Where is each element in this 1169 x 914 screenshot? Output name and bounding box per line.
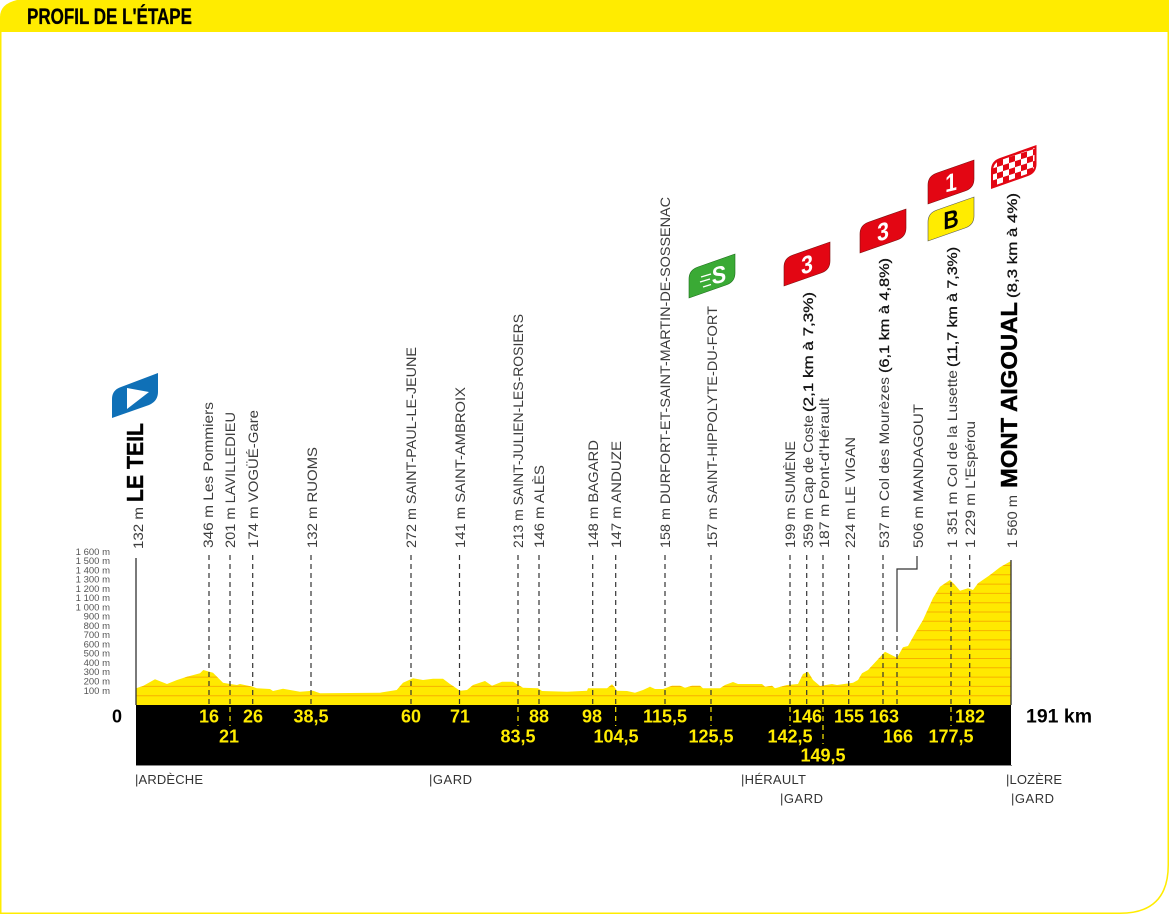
finish label: MONT AIGOUAL — [996, 302, 1022, 488]
elevation profile — [136, 555, 1011, 705]
elevation scale: 1 400 m — [76, 566, 110, 576]
waypoint labels: 201 m LAVILLEDIEU — [222, 412, 238, 548]
waypoint labels: 158 m DURFORT-ET-SAINT-MARTIN-DE-SOSSENAC — [657, 197, 673, 548]
waypoint labels: 187 m Pont-d'Hérault — [816, 398, 832, 548]
finish axis — [1010, 560, 1012, 705]
icon: bonus flag: B — [943, 204, 959, 235]
kilometre markers: 83,5 — [500, 726, 536, 746]
waypoint labels: 157 m SAINT-HIPPOLYTE-DU-FORT — [704, 306, 720, 548]
kilometre markers: 21 — [219, 726, 239, 746]
department labels — [135, 772, 1062, 806]
climb label: Col de la Lusette: 1 351 m Col de la Lusette — [944, 370, 960, 548]
elevation scale: 900 m — [84, 612, 110, 622]
waypoint labels: 213 m SAINT-JULIEN-LES-ROSIERS — [510, 314, 526, 548]
elevation scale — [76, 547, 110, 697]
kilometre markers: 38,5 — [293, 706, 329, 726]
start label — [122, 423, 148, 549]
kilometre markers: 16 — [199, 706, 219, 726]
climb label: Col de la Lusette: (11,7 km à 7,3%) — [944, 247, 960, 367]
elevation scale: 400 m — [84, 658, 110, 669]
kilometre markers: 163 — [869, 706, 899, 726]
yellow tick dashes — [230, 707, 951, 744]
climb label: Col des Mourèzes — [876, 258, 892, 548]
kilometre markers: 98 — [582, 706, 602, 726]
elevation scale: 200 m — [84, 676, 110, 688]
kilometre markers: 60 — [401, 706, 421, 726]
waypoint labels: 148 m BAGARD — [585, 440, 601, 548]
elevation scale: 700 m — [84, 630, 110, 641]
waypoint labels: 147 m ANDUZE — [608, 441, 624, 548]
department labels: |ARDÈCHE — [135, 772, 203, 787]
title: PROFIL DE L'ÉTAPE — [27, 4, 192, 29]
icon: finish flag — [991, 145, 1036, 189]
kilometre markers — [199, 706, 985, 766]
header band — [0, 0, 1169, 32]
elevation scale: 600 m — [84, 640, 110, 650]
waypoint labels: 272 m SAINT-PAUL-LE-JEUNE — [403, 347, 419, 548]
icon: category 1 flag — [928, 160, 974, 204]
climb label: Col des Mourèzes: (6,1 km à 4,8%) — [876, 258, 892, 373]
department labels: |GARD — [780, 791, 823, 806]
kilometre markers: 155 — [834, 706, 864, 726]
kilometre markers: 104,5 — [593, 726, 639, 746]
elevation scale: 1 100 m — [76, 593, 110, 604]
waypoint labels: 346 m Les Pommiers — [200, 402, 216, 548]
waypoint labels: 199 m SUMÈNE — [782, 441, 798, 548]
finish label: (8,3 km à 4%) — [1004, 193, 1020, 298]
climb label: Cap de Coste: 359 m Cap de Coste — [800, 415, 816, 548]
elevation scale: 100 m — [84, 686, 110, 697]
elevation scale: 1 500 m — [76, 556, 110, 567]
finish distance: 191 km — [1026, 706, 1092, 728]
icon: category 3 flag, Mourèzes — [860, 209, 906, 253]
elevation scale: 300 m — [84, 667, 110, 678]
icon: category 3 flag, Cap de Coste — [784, 242, 830, 286]
kilometre markers: 146 — [792, 706, 822, 726]
icon: sprint flag — [689, 254, 735, 298]
kilometre markers: 149,5 — [800, 746, 846, 766]
black kilometre band — [136, 705, 1011, 765]
kilometre markers: 125,5 — [688, 726, 734, 746]
Mandagout leader line — [897, 556, 917, 627]
finish label: 1 560 m — [1004, 495, 1020, 548]
climb label: Cap de Coste: (2,1 km à 7,3%) — [800, 292, 816, 412]
department labels: |LOZÈRE — [1006, 772, 1062, 787]
department labels: |HÉRAULT — [741, 772, 806, 787]
elevation scale: 1 200 m — [76, 584, 110, 595]
waypoint labels: 141 m SAINT-AMBROIX — [452, 386, 468, 548]
kilometre markers: 177,5 — [928, 726, 974, 746]
icon: category 3 flag, Cap de Coste: 3 — [801, 249, 813, 280]
icon: category 1 flag: 1 — [945, 167, 957, 198]
band underline — [136, 764, 1012, 766]
icon: bonus flag — [928, 197, 974, 241]
waypoint dashed lines — [209, 555, 970, 705]
waypoint labels: 224 m LE VIGAN — [842, 437, 858, 548]
waypoint labels: 132 m RUOMS — [304, 447, 320, 548]
waypoint labels: 146 m ALÈS — [531, 465, 547, 548]
elevation scale: 800 m — [84, 621, 110, 632]
waypoint labels — [200, 197, 978, 548]
icon: category 3 flag, Mourèzes: 3 — [877, 216, 889, 247]
start label: LE TEIL — [122, 423, 148, 502]
kilometre markers: 88 — [529, 706, 549, 726]
kilometre markers: 115,5 — [643, 706, 687, 726]
climb label: Col des Mourèzes: 537 m Col des Mourèzes — [876, 377, 892, 548]
elevation scale: 1 600 m — [76, 547, 110, 558]
climb label: Col de la Lusette — [944, 247, 960, 548]
finish label — [996, 193, 1022, 548]
department labels: |GARD — [429, 772, 472, 787]
kilometre markers: 142,5 — [767, 726, 813, 746]
kilometre markers: 26 — [243, 706, 263, 726]
climb label: Cap de Coste — [800, 292, 816, 548]
icon: sprint flag: S — [712, 260, 726, 289]
kilometre markers: 71 — [450, 706, 470, 726]
start axis — [135, 558, 137, 705]
waypoint labels: 174 m VOGÜÉ-Gare — [244, 410, 261, 548]
elevation scale: 500 m — [84, 648, 110, 660]
department labels: |GARD — [1011, 791, 1054, 806]
start distance: 0 — [112, 706, 122, 726]
kilometre markers: 166 — [883, 726, 913, 746]
icon: start flag — [112, 373, 158, 418]
elevation scale: 1 300 m — [76, 574, 110, 586]
waypoint labels: 506 m MANDAGOUT — [910, 404, 926, 548]
kilometre markers: 182 — [955, 706, 985, 726]
waypoint labels: 1 229 m L'Espérou — [962, 421, 978, 548]
start label: 132 m — [130, 507, 146, 549]
elevation scale: 1 000 m — [76, 602, 110, 614]
